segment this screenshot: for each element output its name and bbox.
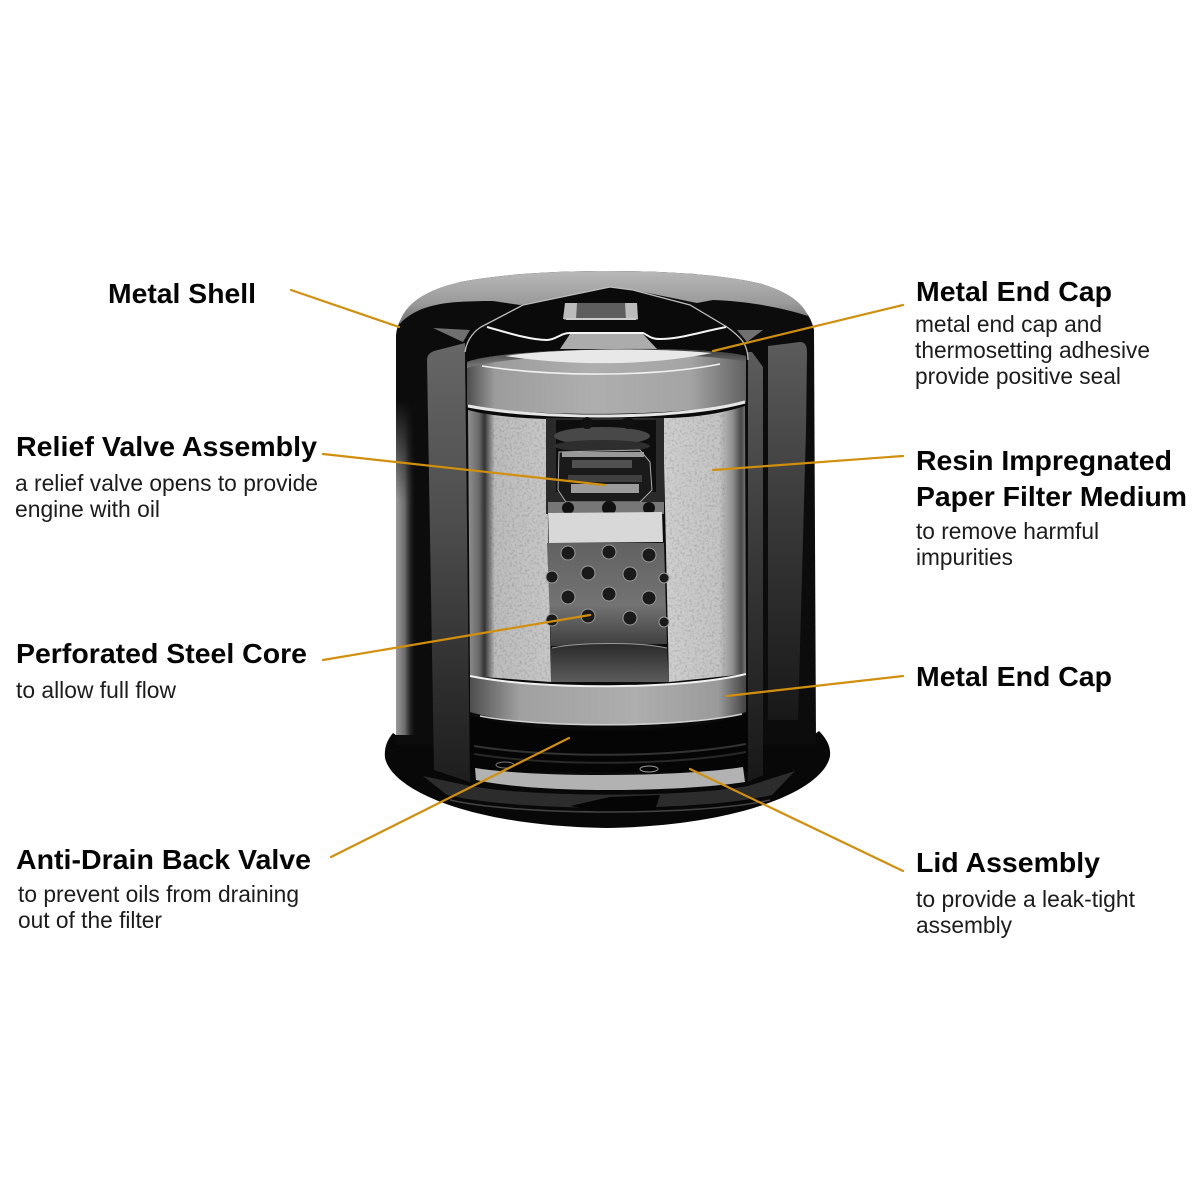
label: Resin Impregnated Paper Filter Medium: Paper Filter Medium	[916, 481, 1187, 512]
lid assembly	[475, 767, 745, 790]
label: Relief Valve Assembly: engine with oil	[15, 496, 160, 522]
label: Relief Valve Assembly	[15, 431, 318, 522]
label: Relief Valve Assembly: a relief valve opens to provide	[15, 470, 318, 496]
label: Metal End Cap, upper: Metal End Cap	[916, 276, 1112, 307]
label: Lid Assembly: assembly	[916, 912, 1012, 938]
label: Perforated Steel Core: Perforated Steel Core	[16, 638, 307, 669]
base flange	[385, 731, 830, 828]
label: Lid Assembly: to provide a leak-tight	[916, 886, 1136, 912]
label: Lid Assembly	[916, 847, 1136, 938]
label: Anti-Drain Back Valve: Anti-Drain Back Valve	[16, 844, 311, 875]
relief valve	[546, 417, 664, 515]
shell left gray band	[427, 343, 470, 782]
label: Metal End Cap, lower: Metal End Cap	[916, 661, 1112, 692]
paper filter medium, left	[468, 410, 551, 682]
label: Perforated Steel Core: to allow full flow	[16, 677, 176, 703]
top cap nut	[487, 303, 726, 349]
shell dome highlight	[399, 271, 808, 325]
label: Relief Valve Assembly: Relief Valve Assembly	[16, 431, 317, 462]
label: Metal End Cap, upper	[915, 276, 1150, 389]
cutaway opening	[465, 287, 748, 782]
label: Resin Impregnated Paper Filter Medium: to remove harmful	[916, 518, 1099, 544]
shell left edge reflection	[396, 406, 413, 735]
metal end cap, lower	[470, 674, 746, 726]
anti-drain back valve	[470, 714, 748, 772]
label: Perforated Steel Core	[16, 638, 307, 703]
label: Resin Impregnated Paper Filter Medium: impurities	[916, 544, 1013, 570]
paper filter medium, right	[663, 406, 746, 682]
label: Metal End Cap, upper: thermosetting adhesive	[915, 337, 1150, 363]
label: Anti-Drain Back Valve	[16, 844, 311, 933]
label: Lid Assembly: Lid Assembly	[916, 847, 1100, 878]
leader lines	[291, 290, 903, 871]
metal end cap, upper	[467, 349, 746, 416]
paper grain	[490, 412, 725, 682]
label: Metal End Cap, upper: metal end cap and	[915, 311, 1102, 337]
metal shell	[396, 271, 816, 745]
label: Metal End Cap, upper: provide positive seal	[915, 363, 1121, 389]
label: Anti-Drain Back Valve: to prevent oils from draining	[18, 881, 299, 907]
flange band	[423, 771, 795, 812]
shell right gray bands	[748, 352, 763, 782]
perforated steel core	[546, 543, 669, 682]
label: Anti-Drain Back Valve: out of the filter	[18, 907, 162, 933]
label: Metal Shell: Metal Shell	[108, 278, 256, 309]
illustration: oil filter cutaway	[385, 271, 830, 828]
valve retaining strip	[548, 512, 663, 543]
label: Resin Impregnated Paper Filter Medium: Resin Impregnated	[916, 445, 1172, 476]
label: Resin Impregnated Paper Filter Medium	[916, 445, 1187, 570]
